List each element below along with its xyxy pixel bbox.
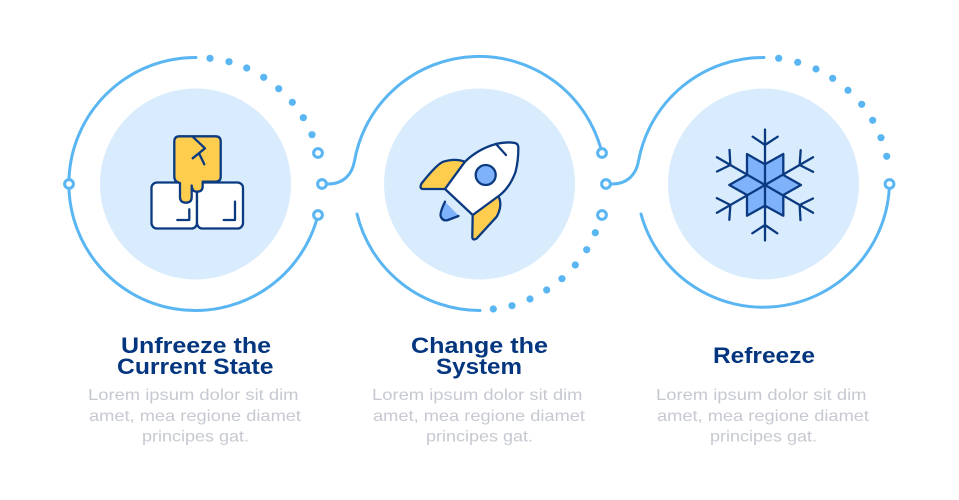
node: right end [885, 180, 894, 188]
dotted arc: refreeze [775, 55, 890, 160]
panel: unfreeze [65, 55, 322, 445]
node: lower right [598, 211, 606, 219]
text block: unfreeze [88, 387, 302, 446]
ring: change lower arc [357, 214, 480, 311]
node: left start [65, 180, 73, 188]
background circle: refreeze [668, 88, 859, 280]
text block: refreeze: Lorem ipsum dolor sit dim [656, 387, 866, 404]
heading: unfreeze: Current State [117, 354, 274, 379]
background circle: unfreeze [100, 88, 291, 280]
node: connector [318, 180, 326, 188]
ring: refreeze lower arc [641, 184, 890, 307]
node: connector [602, 180, 610, 188]
heading: change: System [436, 354, 522, 379]
node: lower right [314, 211, 322, 219]
text block: change: Lorem ipsum dolor sit dim [372, 387, 582, 404]
background circle: change [384, 88, 575, 280]
heading: refreeze: Refreeze [713, 343, 815, 368]
node: upper right [598, 149, 606, 157]
panel: refreeze [602, 55, 894, 445]
icon: snowflake [711, 130, 819, 240]
ring: change upper arc with connector [325, 56, 602, 184]
ring: unfreeze arc [69, 57, 318, 310]
heading: unfreeze [117, 333, 274, 379]
text block: change: principes gat. [426, 428, 533, 446]
text block: change [372, 387, 586, 446]
dotted arc: unfreeze [206, 55, 316, 138]
text block: unfreeze: Lorem ipsum dolor sit dim [88, 387, 298, 404]
text block: unfreeze: principes gat. [142, 428, 249, 446]
node: upper right [314, 149, 322, 157]
text block: refreeze [656, 387, 870, 446]
icon: rocket [421, 142, 518, 239]
icon: melting ice cubes [152, 136, 243, 228]
heading: change [411, 333, 548, 379]
text block: refreeze: principes gat. [710, 428, 817, 446]
panel: change [318, 56, 606, 445]
ring: refreeze upper arc with connector [609, 57, 764, 184]
text block: refreeze: amet, mea regione diamet [657, 408, 870, 425]
text block: change: amet, mea regione diamet [373, 408, 586, 425]
dotted arc: change [490, 229, 599, 313]
heading: unfreeze: Unfreeze the [121, 333, 271, 358]
heading: change: Change the [411, 333, 548, 358]
text block: unfreeze: amet, mea regione diamet [89, 408, 302, 425]
